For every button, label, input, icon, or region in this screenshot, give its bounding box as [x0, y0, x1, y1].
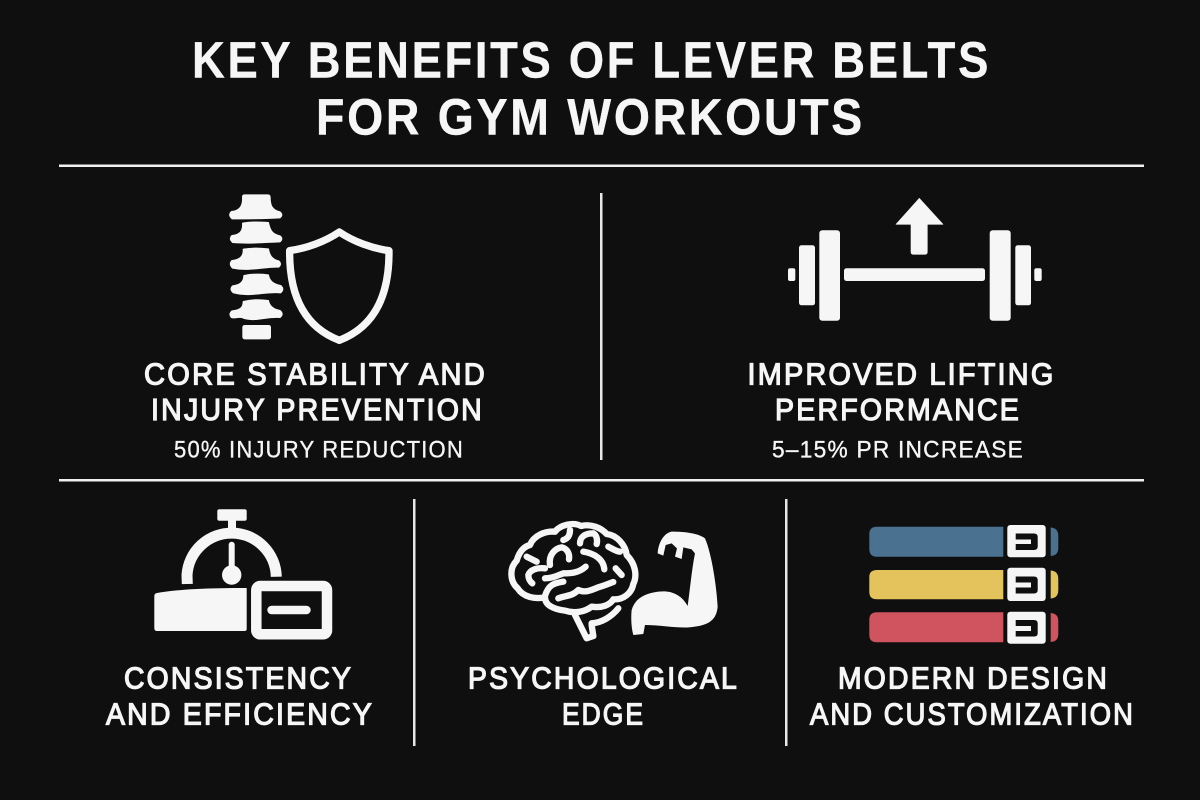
panel: core stability: [144, 195, 487, 463]
panel: consistency: [106, 509, 374, 731]
heading: AND CUSTOMIZATION: [810, 696, 1135, 731]
icon: flexed arm: [631, 532, 718, 635]
icon: shield: [290, 232, 389, 340]
stat: PR increase: 5–15% PR INCREASE: [772, 436, 1024, 463]
heading: PERFORMANCE: [775, 392, 1021, 427]
title: FOR GYM WORKOUTS: [316, 88, 865, 146]
icon: spine and shield: [230, 195, 389, 340]
heading: [106, 660, 374, 731]
heading: PSYCHOLOGICAL: [468, 660, 739, 695]
panel: psychological edge: [468, 524, 739, 731]
heading: CORE STABILITY AND: [144, 356, 487, 392]
heading: IMPROVED LIFTING: [748, 356, 1056, 392]
heading: [810, 660, 1135, 731]
icon: stopwatch and belt: [154, 509, 327, 634]
icon: spine: [230, 195, 283, 339]
title: [192, 32, 991, 146]
icon: barbell with up arrow: [788, 198, 1042, 321]
icon: blue belt: [869, 525, 1058, 557]
heading: EDGE: [562, 696, 645, 731]
icon: brain and flexed arm: [511, 524, 718, 638]
panel: modern design: [810, 525, 1135, 731]
heading: [748, 356, 1056, 427]
icon: red belt: [869, 612, 1058, 644]
stat: injury reduction: 50% INJURY REDUCTION: [174, 436, 464, 463]
panel: lifting performance: [748, 198, 1056, 463]
icon: yellow belt: [869, 568, 1058, 601]
heading: [144, 356, 487, 427]
heading: INJURY PREVENTION: [151, 392, 484, 427]
icon: brain: [511, 524, 635, 638]
title: KEY BENEFITS OF LEVER BELTS: [192, 32, 991, 88]
heading: AND EFFICIENCY: [106, 696, 374, 731]
heading: [468, 660, 739, 731]
heading: MODERN DESIGN: [838, 660, 1109, 695]
heading: CONSISTENCY: [124, 660, 353, 695]
